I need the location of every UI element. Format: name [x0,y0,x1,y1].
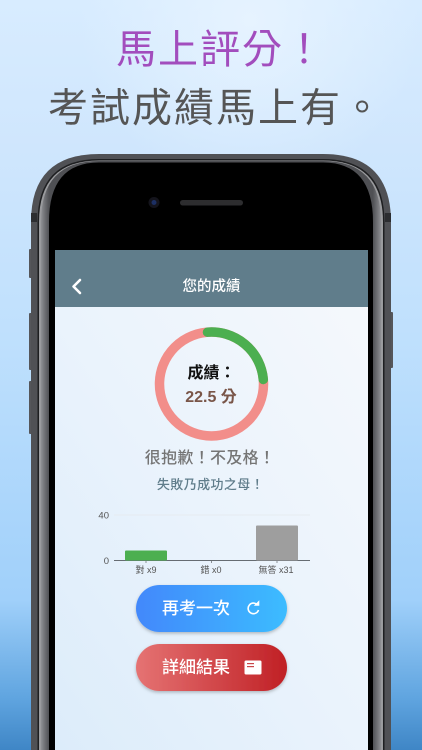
phone [29,154,393,750]
bar chart: 0 [104,556,109,567]
bar chart [98,510,310,575]
phone body [31,154,391,750]
bar chart: 40 [98,510,109,522]
bar: unanswered [256,526,298,560]
bar chart: 無答 x31 [258,564,294,575]
button: details [136,644,287,691]
button: retry [136,585,287,632]
score value: 22.5 分 [185,388,237,406]
icon: refresh [248,601,259,614]
header title: 您的成績 [182,278,240,295]
app header [55,250,368,307]
back arrow [74,280,80,293]
side buttons [29,249,393,434]
result message: 很抱歉！不及格！ [145,449,275,467]
speaker [180,200,243,206]
bar: correct [125,550,167,560]
encouragement: 失敗乃成功之母！ [157,477,264,492]
button: retry: 再考一次 [162,599,230,618]
camera [148,197,160,208]
bar chart: 錯 x0 [200,564,222,575]
button: details: 詳細結果 [162,658,230,677]
app screen [55,250,368,750]
score label: 成績： [187,363,236,382]
score ring [160,332,264,436]
icon: card [244,660,262,674]
heading: 馬上評分: 馬上評分！ [116,28,326,72]
heading: 考試成績馬上有: 考試成績馬上有。 [48,86,384,130]
bar chart: 對 x9 [135,564,157,575]
